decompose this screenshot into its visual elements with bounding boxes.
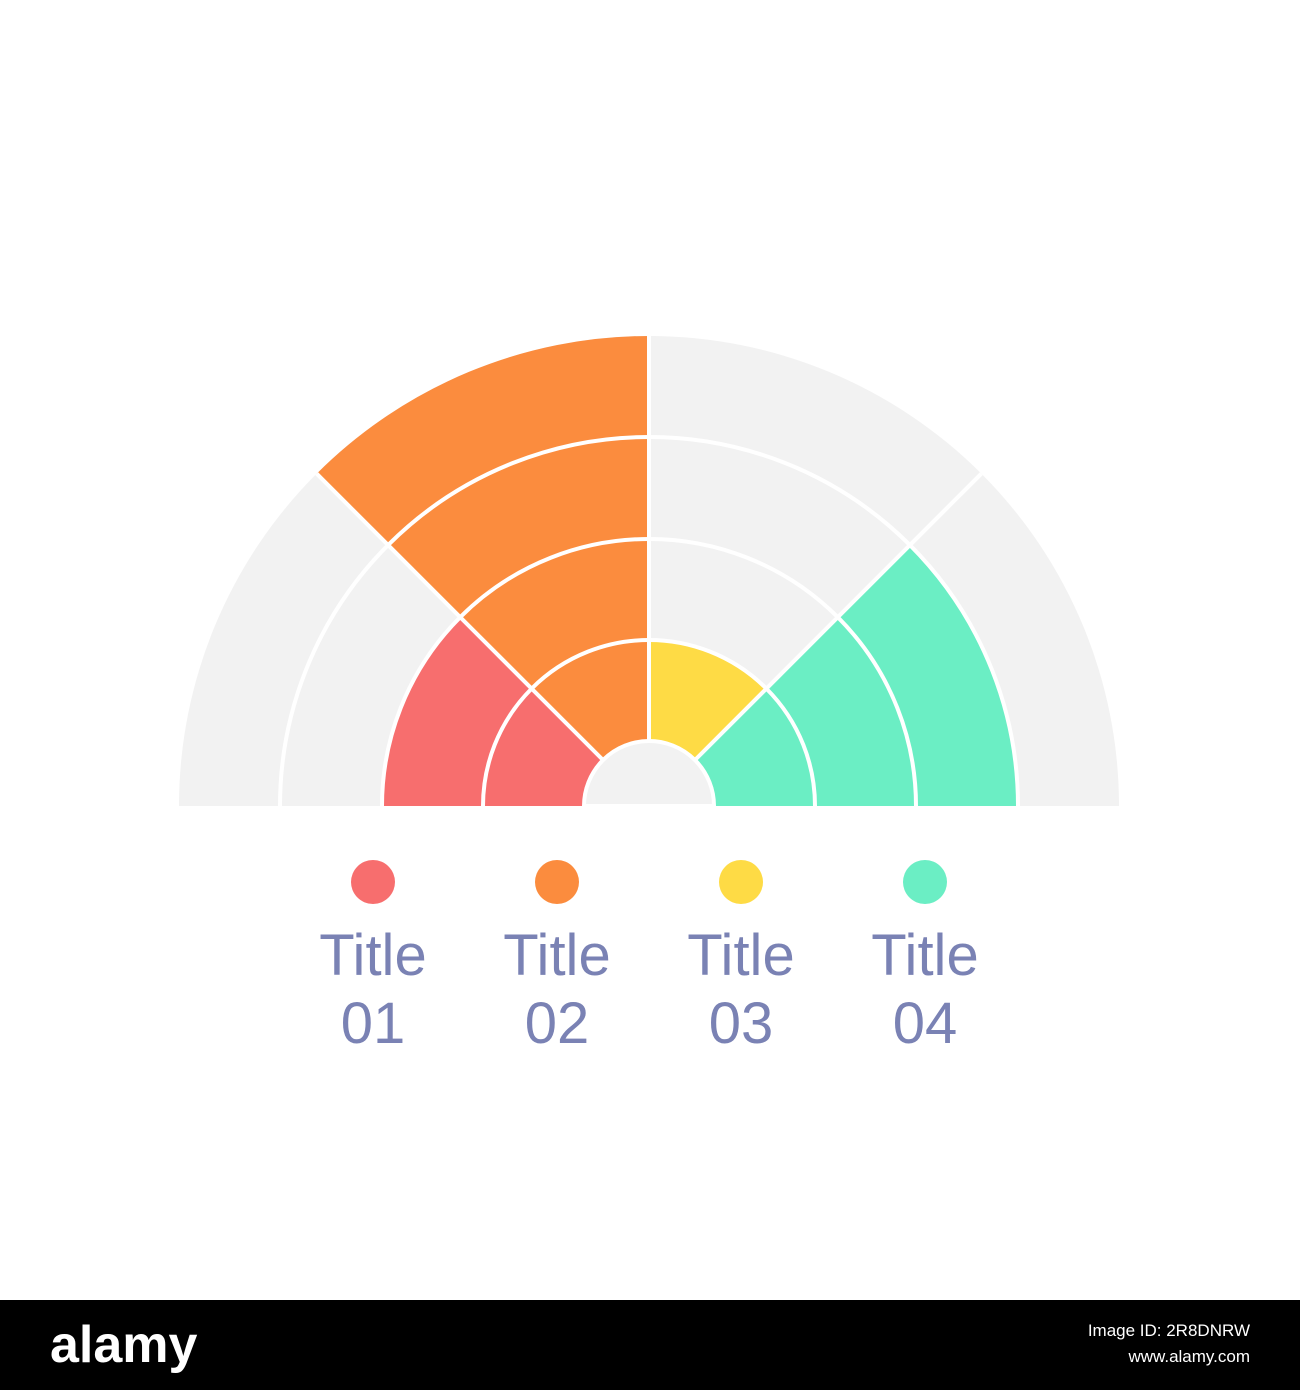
legend item 01 [319,860,427,1056]
legend item 02 [503,860,611,1056]
legend item 04: 04 [893,991,957,1056]
legend item 04: Title [871,923,979,988]
footer bar [0,1300,1300,1390]
legend item 04 [871,860,979,1056]
legend item 02: 02 [525,991,589,1056]
legend item 01: 01 [341,991,405,1056]
center hole [584,741,714,806]
chart background rings [179,334,1119,806]
legend item 03: 03 [709,991,773,1056]
legend item 01: Title [319,923,427,988]
legend [319,860,979,1056]
legend item 03 [687,860,795,1056]
sector: Title 04 green [695,545,1018,806]
sector: Title 01 red [382,617,603,806]
footer logo: alamy [50,1316,198,1374]
sector: Title 02 orange [317,336,649,760]
legend item 03: Title [687,923,795,988]
legend item 02: Title [503,923,611,988]
sector: Title 03 yellow [649,640,766,760]
footer bar: www.alamy.com [1127,1347,1250,1366]
footer id text: Image ID: 2R8DNRW [1088,1321,1250,1340]
